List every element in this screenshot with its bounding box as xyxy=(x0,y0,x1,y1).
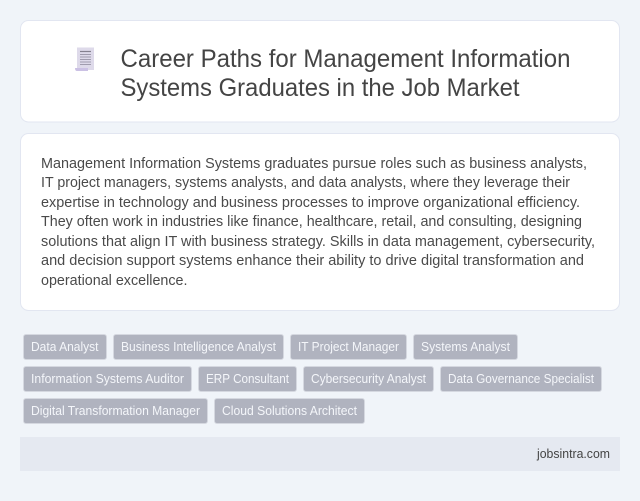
title xyxy=(120,45,570,102)
icon: document scroll xyxy=(75,48,94,71)
tag: Digital Transformation Manager: Digital Transformation Manager xyxy=(31,404,200,418)
tag: Information Systems Auditor: Information Systems Auditor xyxy=(31,372,184,386)
description text: expertise in technology and business processes to improve organizational efficiency. xyxy=(41,195,580,211)
tag: Cloud Solutions Architect: Cloud Solutions Architect xyxy=(222,404,358,418)
description text: They often work in industries like finance, healthcare, retail, and consulting, designing xyxy=(41,214,582,230)
tag: Data Analyst xyxy=(24,334,106,360)
tag: Systems Analyst: Systems Analyst xyxy=(421,340,511,354)
tag: IT Project Manager xyxy=(290,334,406,360)
tag: Cybersecurity Analyst: Cybersecurity Analyst xyxy=(311,372,427,386)
tag: Cybersecurity Analyst xyxy=(304,366,434,392)
tag: Data Governance Specialist xyxy=(440,366,602,392)
tag: Systems Analyst xyxy=(414,334,518,360)
tag: Cloud Solutions Architect xyxy=(214,398,364,424)
tag: Data Governance Specialist: Data Governance Specialist xyxy=(448,372,594,386)
title: Career Paths for Management Information xyxy=(120,45,570,73)
tag: IT Project Manager: IT Project Manager xyxy=(298,340,399,354)
panel: header xyxy=(20,20,620,122)
tag: ERP Consultant xyxy=(198,366,296,392)
panel: description xyxy=(20,134,620,310)
tag: Business Intelligence Analyst xyxy=(114,334,284,360)
description text: solutions that align IT with business strategy. Skills in data management, cybersecurity, xyxy=(41,234,595,250)
description text: Management Information Systems graduates pursue roles such as business analysts, xyxy=(41,156,587,172)
career path tags xyxy=(24,334,602,424)
footer source: jobsintra.com xyxy=(536,447,610,461)
description text: and decision support systems enhance their ability to drive digital transformation and xyxy=(41,253,584,269)
tag: Business Intelligence Analyst: Business Intelligence Analyst xyxy=(121,340,276,354)
description text: operational excellence. xyxy=(41,273,188,289)
title: Systems Graduates in the Job Market xyxy=(120,74,520,102)
tag: Digital Transformation Manager xyxy=(24,398,208,424)
description text: IT project managers, systems analysts, and data analysts, where they leverage their xyxy=(41,175,570,191)
tag: ERP Consultant: ERP Consultant xyxy=(206,372,289,386)
description text xyxy=(41,156,595,289)
tag: Data Analyst: Data Analyst xyxy=(31,340,99,354)
tag: Information Systems Auditor xyxy=(24,366,192,392)
footer xyxy=(20,437,620,471)
